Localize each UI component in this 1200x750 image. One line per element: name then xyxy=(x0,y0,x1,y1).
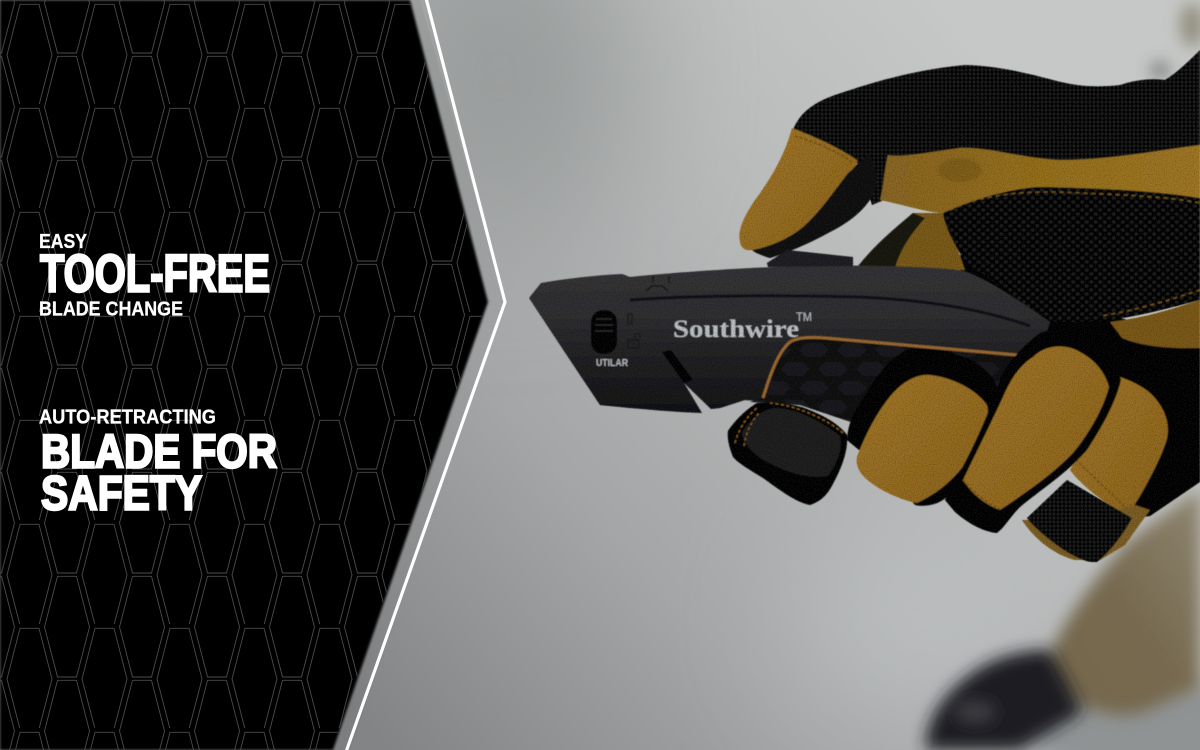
hand back: black knit xyxy=(793,50,1200,210)
blurred boot xyxy=(926,650,1082,750)
lock icons xyxy=(628,314,640,348)
knife body xyxy=(529,266,1050,420)
white chevron outline xyxy=(346,0,505,750)
thumb: black leather xyxy=(728,403,847,505)
black chevron panel xyxy=(0,0,505,750)
lower black palm shadow xyxy=(960,255,1200,520)
text: BLADE FOR: BLADE FOR xyxy=(41,426,277,478)
ring finger xyxy=(945,330,1121,533)
text: BLADE CHANGE: BLADE CHANGE xyxy=(39,298,183,320)
chevron shadow xyxy=(0,0,505,750)
tan glove band xyxy=(880,145,1200,213)
text: TOOL-FREE: TOOL-FREE xyxy=(40,244,270,304)
trademark: TM xyxy=(796,310,812,324)
black textured palm pad xyxy=(943,187,1200,322)
third finger xyxy=(1070,377,1168,515)
fingertip stitching xyxy=(795,136,852,162)
text: EASY: EASY xyxy=(39,230,87,253)
knife top highlight xyxy=(646,276,669,291)
text: SAFETY: SAFETY xyxy=(41,466,202,520)
logo: Southwire: Southwire xyxy=(673,316,799,343)
blurred trouser leg xyxy=(1040,488,1200,715)
palm behind knife xyxy=(860,213,965,270)
slider trigger xyxy=(767,250,853,267)
label: UTILAR: UTILAR xyxy=(596,357,628,369)
band shadow crease xyxy=(938,158,982,182)
knife groove xyxy=(630,296,1030,326)
lower tan patch xyxy=(1110,300,1200,348)
blade slit xyxy=(662,350,693,383)
knit cuff xyxy=(1027,480,1132,562)
text: AUTO-RETRACTING: AUTO-RETRACTING xyxy=(39,406,216,428)
thumb tip black under index finger xyxy=(752,155,877,258)
orange accent line xyxy=(763,337,1017,398)
grip panel with hex texture xyxy=(750,337,1017,425)
index finger tan tip xyxy=(739,128,857,250)
callout: easy tool-free blade change xyxy=(39,230,270,320)
middle finger xyxy=(847,348,1000,506)
hand and utility knife xyxy=(529,50,1200,562)
blurred object top right xyxy=(1151,3,1200,77)
callout: auto-retracting blade for safety xyxy=(39,406,277,520)
pad stitching xyxy=(950,192,1200,316)
palm dark seam xyxy=(858,213,925,268)
hexagon pattern panel xyxy=(0,0,487,750)
tan slivers below cuff xyxy=(1022,505,1150,560)
blade lock slider window xyxy=(591,310,617,354)
